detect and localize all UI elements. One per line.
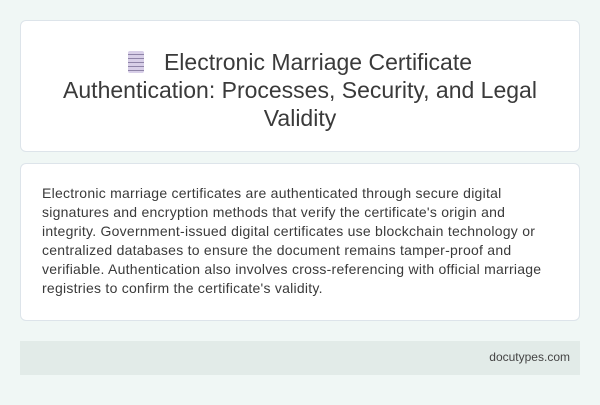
footer bar	[20, 341, 580, 375]
panel: description	[20, 163, 580, 321]
footer text: docutypes.com	[489, 350, 570, 364]
title: Electronic Marriage Certificate Authentication: Processes, Security, and Legal Validity	[63, 49, 537, 131]
panel: title card	[20, 20, 580, 152]
icon: certificate scroll	[128, 51, 144, 73]
text block: Electronic marriage certificates are authenticated through secure digital signatures and encryption methods that verify the certificate's origin and integrity. Government-issued digital certificates use blockchain technology or centralized databases to ensure the document remains tamper-proof and verifiable. Authentication also involves cross-referencing with official marriage registries to confirm the certificate's validity.	[42, 185, 541, 296]
